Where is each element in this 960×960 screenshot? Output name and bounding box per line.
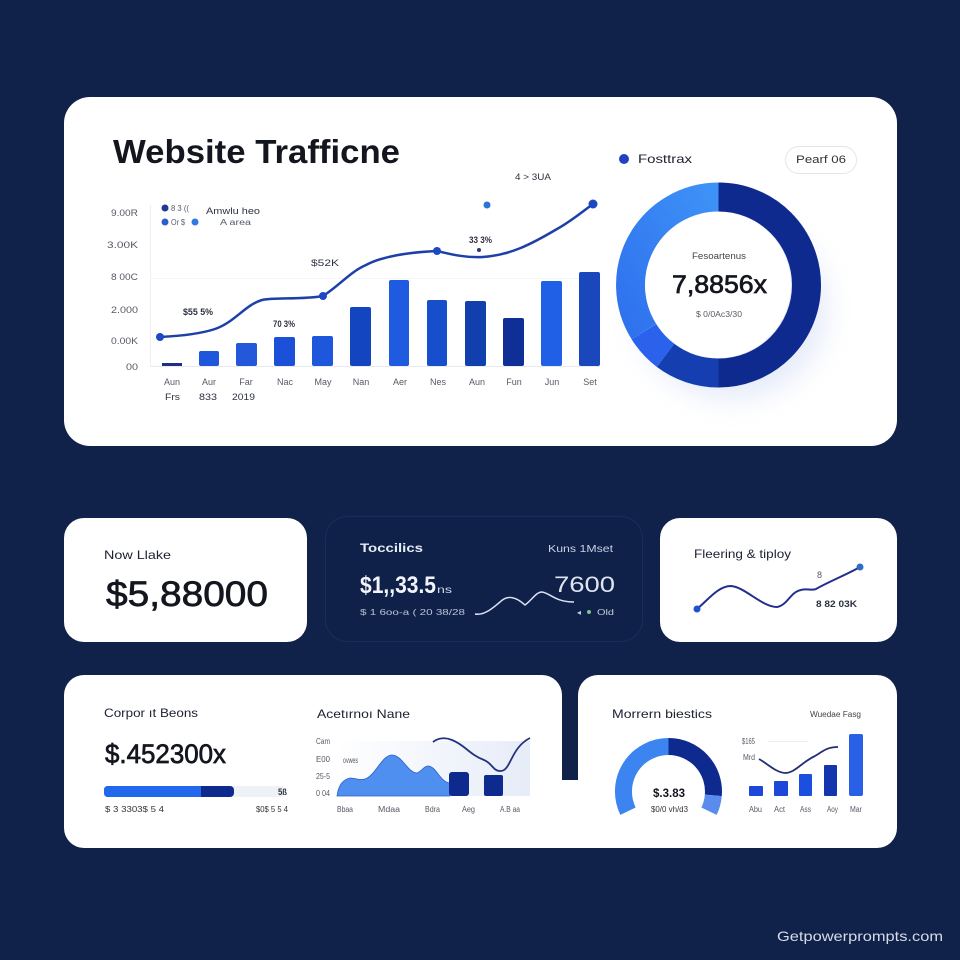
x axis labels: Nac <box>277 377 293 387</box>
area chart: 0 04 <box>316 789 330 798</box>
donut centre text: Fesoartenus <box>692 251 747 261</box>
mini bar and line chart: Abu <box>749 805 762 814</box>
x axis labels: 833 <box>199 392 217 402</box>
data labels: 33 3% <box>469 235 492 245</box>
progress bar: 5ß <box>278 787 287 797</box>
mini bar and line chart: Mrd <box>743 753 755 762</box>
y axis labels: 0.00K <box>111 336 138 346</box>
panel: bottom left: Acetırnoı Nane <box>317 707 410 721</box>
progress bar: $ 3 3303$ 5 4 <box>105 805 165 814</box>
donut centre text: 7,8856x <box>672 271 768 299</box>
area chart: 25-5 <box>316 772 330 781</box>
mini bar and line chart: $165 <box>742 737 755 746</box>
donut legend: Fosttrax <box>638 152 692 166</box>
mini bar and line chart: Act <box>774 805 786 814</box>
data labels <box>183 172 551 329</box>
area chart: E00 <box>316 755 331 764</box>
x axis labels: Frs <box>165 392 181 402</box>
x axis labels: Fun <box>506 377 522 387</box>
period pill: Pearf 06 <box>796 154 846 166</box>
trend sparkline <box>697 567 860 609</box>
mini bar and line chart <box>742 734 863 814</box>
area chart: Mdaa <box>378 805 401 814</box>
data labels: $55 5% <box>183 307 213 317</box>
progress bar: $0$ 5 5 4 <box>256 805 289 814</box>
x axis labels <box>164 377 597 402</box>
card: dark statistics: 7600 <box>554 572 615 597</box>
trend line <box>156 200 598 341</box>
card: dark statistics: ◂ <box>577 608 581 617</box>
mini bar and line chart: Aoy <box>827 805 838 814</box>
x axis labels: Aer <box>393 377 407 387</box>
panel: bottom left <box>64 675 600 848</box>
gauge chart: $0/0 vh/d3 <box>651 805 689 814</box>
title: Website Trafficne <box>113 133 400 170</box>
data labels: $52K <box>311 258 339 268</box>
x axis labels: 2019 <box>232 392 255 402</box>
chart legend: A area <box>220 218 252 227</box>
card: revenue: $5,88000 <box>106 575 268 614</box>
mini bar and line chart: Mar <box>850 805 862 814</box>
x axis labels: May <box>314 377 332 387</box>
chart legend: 8 3 (( <box>171 204 189 213</box>
card: dark statistics: Kuns 1Mset <box>548 544 613 555</box>
area chart <box>316 737 530 814</box>
card: dark statistics: Toccilics <box>360 541 423 555</box>
progress bar <box>104 786 289 814</box>
x axis labels: Nan <box>353 377 369 387</box>
card: trend: 8 82 03K <box>816 599 858 609</box>
card: trend: Fleering & tiploy <box>694 547 791 561</box>
panel: bottom right: Morrern biestics <box>612 707 712 721</box>
panel: bottom right <box>578 675 897 848</box>
card: dark statistics: Old <box>597 608 614 617</box>
area chart: Bdra <box>425 805 440 814</box>
x axis labels: Aur <box>202 377 216 387</box>
x axis labels: Nes <box>430 377 446 387</box>
card: revenue: Now Llake <box>104 548 171 562</box>
card: dark statistics: $1,,33.5 <box>360 572 436 599</box>
x axis labels: Set <box>583 377 597 387</box>
donut centre text <box>672 251 768 319</box>
y axis labels: 00 <box>126 362 138 372</box>
donut legend <box>619 152 692 166</box>
chart legend: Or $ <box>171 218 185 227</box>
watermark: Getpowerprompts.com <box>777 928 943 944</box>
panel: website traffic <box>64 97 897 446</box>
area chart: Aeg <box>462 805 475 814</box>
donut chart <box>631 197 826 398</box>
panel: bottom left: $.452300x <box>105 739 226 769</box>
mini bar and line chart: Ass <box>800 805 811 814</box>
y axis labels: 8 00C <box>111 272 139 282</box>
x axis labels: Aun <box>164 377 180 387</box>
y axis labels: 9.00R <box>111 208 139 218</box>
data labels: 70 3% <box>273 319 295 329</box>
bar chart <box>162 272 600 366</box>
area chart: Cam <box>316 737 330 746</box>
x axis labels: Aun <box>469 377 485 387</box>
period pill <box>786 146 856 174</box>
card: revenue <box>64 518 307 642</box>
x axis labels: Far <box>239 377 253 387</box>
x axis labels: Jun <box>545 377 559 387</box>
card: dark statistics: $ 1 6oo-a ( 20 38/28 <box>360 608 466 617</box>
area chart: Bbaa <box>337 805 353 814</box>
panel: bottom right: Wuedae Fasg <box>810 710 861 719</box>
donut centre text: $ 0/0Ac3/30 <box>696 310 743 319</box>
card: trend <box>660 518 897 642</box>
y axis labels <box>107 208 139 372</box>
chart legend: Amwlu heo <box>206 206 260 216</box>
sparkline <box>475 592 574 614</box>
chart legend <box>162 204 260 227</box>
panel: bottom left: Corpor ıt Beons <box>104 706 198 720</box>
card: dark statistics <box>326 516 642 642</box>
area chart: A.B aa <box>500 805 520 814</box>
data labels: 4 > 3UA <box>515 172 551 182</box>
gauge chart: $.3.83 <box>653 786 685 800</box>
area chart: ovwes <box>343 756 358 765</box>
card: trend: 8 <box>817 570 822 580</box>
card: dark statistics: ns <box>437 585 452 596</box>
y axis labels: 2.000 <box>111 305 138 315</box>
gauge chart <box>623 746 713 814</box>
y axis labels: 3.00K <box>107 240 138 250</box>
